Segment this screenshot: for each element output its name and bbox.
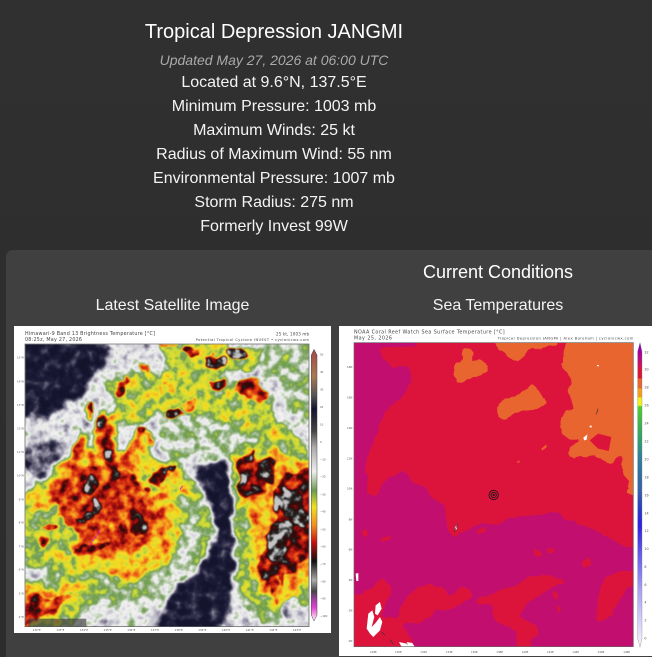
satellite storm track and image labels [17,331,309,632]
title: Tropical Depression JANGMI [145,21,403,43]
sea temperature labels: 6N [349,548,352,552]
storm radius: Storm Radius: 275 nm [194,194,354,211]
satellite temperature colorbar: −60 [320,545,326,549]
sea temperature labels: 4N [349,578,352,582]
satellite temperature colorbar: −50 [320,527,326,531]
satellite temperature colorbar: 30 [320,388,324,392]
sea temperature colorbar: 16 [644,493,649,497]
sea temperature labels: 14N [347,426,352,430]
satellite storm track and image labels: 133°E [56,628,65,632]
sea temperature colorbar: 10 [644,547,649,551]
sea temperature colorbar: 20 [644,457,649,461]
satellite temperature colorbar: 40 [320,370,324,374]
satellite storm track and image labels: 8°N [19,521,24,525]
satellite storm track and image labels: 139°E [198,628,207,632]
panel: current conditions [6,250,652,657]
maximum winds: Maximum Winds: 25 kt [193,122,355,139]
satellite temperature colorbar: −20 [320,475,326,479]
sea temperature labels: 142E [547,650,554,654]
satellite temperature colorbar: −10 [320,457,326,461]
satellite storm track and image labels: 14°N [17,379,24,383]
satellite storm track and image labels: 140°E [222,628,230,632]
sea surface temperature chart [338,326,652,657]
heading: current conditions: Current Conditions [423,262,573,282]
satellite temperature colorbar: −40 [320,510,326,514]
sea temperature colorbar [638,343,649,647]
environmental pressure: Environmental Pressure: 1007 mb [153,170,395,187]
sea temperature labels: 8N [349,517,352,521]
satellite temperature colorbar: −30 [320,492,326,496]
sea temperature labels: 12N [347,456,352,460]
sea temperature labels: Tropical Depression JANGMI | Alex Boreham | cyclonicwx.com [497,337,634,341]
satellite storm track and image labels: 5°N [19,591,24,595]
sea temperature colorbar: 32 [644,350,649,354]
satellite storm track and image labels: 132°E [33,628,41,632]
satellite storm track and image labels: 10°N [17,474,24,478]
sea temperature labels: 2N [349,608,352,612]
satellite temperature colorbar: 20 [320,405,324,409]
sea temperature colorbar: 26 [644,404,649,408]
sea temperature colorbar: 12 [644,529,649,533]
sea temperature labels: NOAA Coral Reef Watch Sea Surface Temperature [°C] [354,330,505,336]
sea temperature labels: 130E [395,650,402,654]
satellite plot field [13,337,320,640]
sea temperature colorbar: 18 [644,475,649,479]
sea temperature colorbar: 0 [644,636,646,640]
satellite temperature colorbar [311,349,328,621]
sea temperature colorbar: 4 [644,601,646,605]
satellite storm track and image labels: 11°N [17,450,24,454]
sea temperature labels: 140E [522,650,529,654]
satellite temperature colorbar: −70 [320,562,326,566]
storm location: Located at 9.6°N, 137.5°E [181,74,367,91]
satellite storm track and image labels: 143°E [293,628,301,632]
satellite storm track and image labels: Himawari-9 Band 13 Brightness Temperature [°C] [25,331,155,337]
satellite storm track and image labels: 08:25z, May 27, 2026 [25,337,82,343]
sea temperature colorbar: 28 [644,386,649,390]
sea temperature labels [347,330,634,654]
satellite storm track and image labels: 138°E [175,628,183,632]
satellite temperature colorbar: −80 [320,579,326,583]
satellite storm track and image labels: 9°N [19,497,24,501]
satellite storm track and image labels: 6°N [19,568,24,572]
sea temperature labels: 136E [471,650,478,654]
satellite storm track and image labels: 141°E [246,628,254,632]
satellite storm track and image labels: 25 kt, 1003 mb [276,332,309,337]
sea temperature labels: 0N [349,639,352,643]
update timestamp: Updated May 27, 2026 at 06:00 UTC [160,52,388,68]
satellite storm track and image labels: Potential Tropical Cyclone INVEST • cyclonicwx.com [196,338,309,342]
sea temperature colorbar: 24 [644,422,649,426]
satellite temperature colorbar: 10 [320,422,324,426]
sea temperature colorbar: 8 [644,565,646,569]
satellite storm track and image labels: 142°E [269,628,278,632]
storm position marker [489,490,498,500]
satellite storm track and image labels: 12°N [17,426,24,430]
sea temperature image background [339,326,652,656]
sea temperature labels: 138E [496,650,503,654]
heading: sea temperatures: Sea Temperatures [433,297,563,314]
satellite storm track and image labels: 134°E [80,628,88,632]
satellite storm track and image labels: 4°N [19,615,24,619]
satellite storm track and image labels: 137°E [151,628,159,632]
satellite temperature colorbar: −100 [320,614,328,618]
minimum pressure: Minimum Pressure: 1003 mb [172,98,376,115]
sea temperature labels: 146E [598,650,605,654]
former designation: Formerly Invest 99W [200,218,348,235]
satellite temperature colorbar: −90 [320,597,326,601]
sea temperature labels: 134E [446,650,453,654]
radius of maximum wind: Radius of Maximum Wind: 55 nm [156,146,392,163]
sea temperature colorbar: 2 [644,619,646,623]
sea temperature colorbar: 6 [644,583,646,587]
sea temperature labels: 148E [623,650,630,654]
satellite image background [14,326,331,633]
sea temperature labels: 144E [572,650,579,654]
satellite temperature colorbar: 50 [320,353,324,357]
satellite storm track and image labels: 7°N [19,544,24,548]
sea temperature colorbar: 22 [644,440,649,444]
sea temperature labels: May 25, 2026 [354,336,392,342]
satellite storm track and image labels: 136°E [127,628,136,632]
satellite storm track and image labels: 135°E [104,628,112,632]
satellite storm track and image labels: 15°N [17,355,24,359]
heading: latest satellite image: Latest Satellite Image [96,297,249,314]
sea temperature labels: 16N [347,395,352,399]
sea temperature colorbar: 30 [644,368,649,372]
sea temperature labels: 128E [370,650,377,654]
sea temperature colorbar: 14 [644,511,649,515]
satellite storm track and image labels: 13°N [17,403,24,407]
sea temperature labels: 132E [420,650,427,654]
satellite temperature colorbar: 0 [320,440,322,444]
sea temperature labels: 18N [347,365,352,369]
sea temperature labels: 10N [347,487,352,491]
sea temperature map [354,343,633,646]
